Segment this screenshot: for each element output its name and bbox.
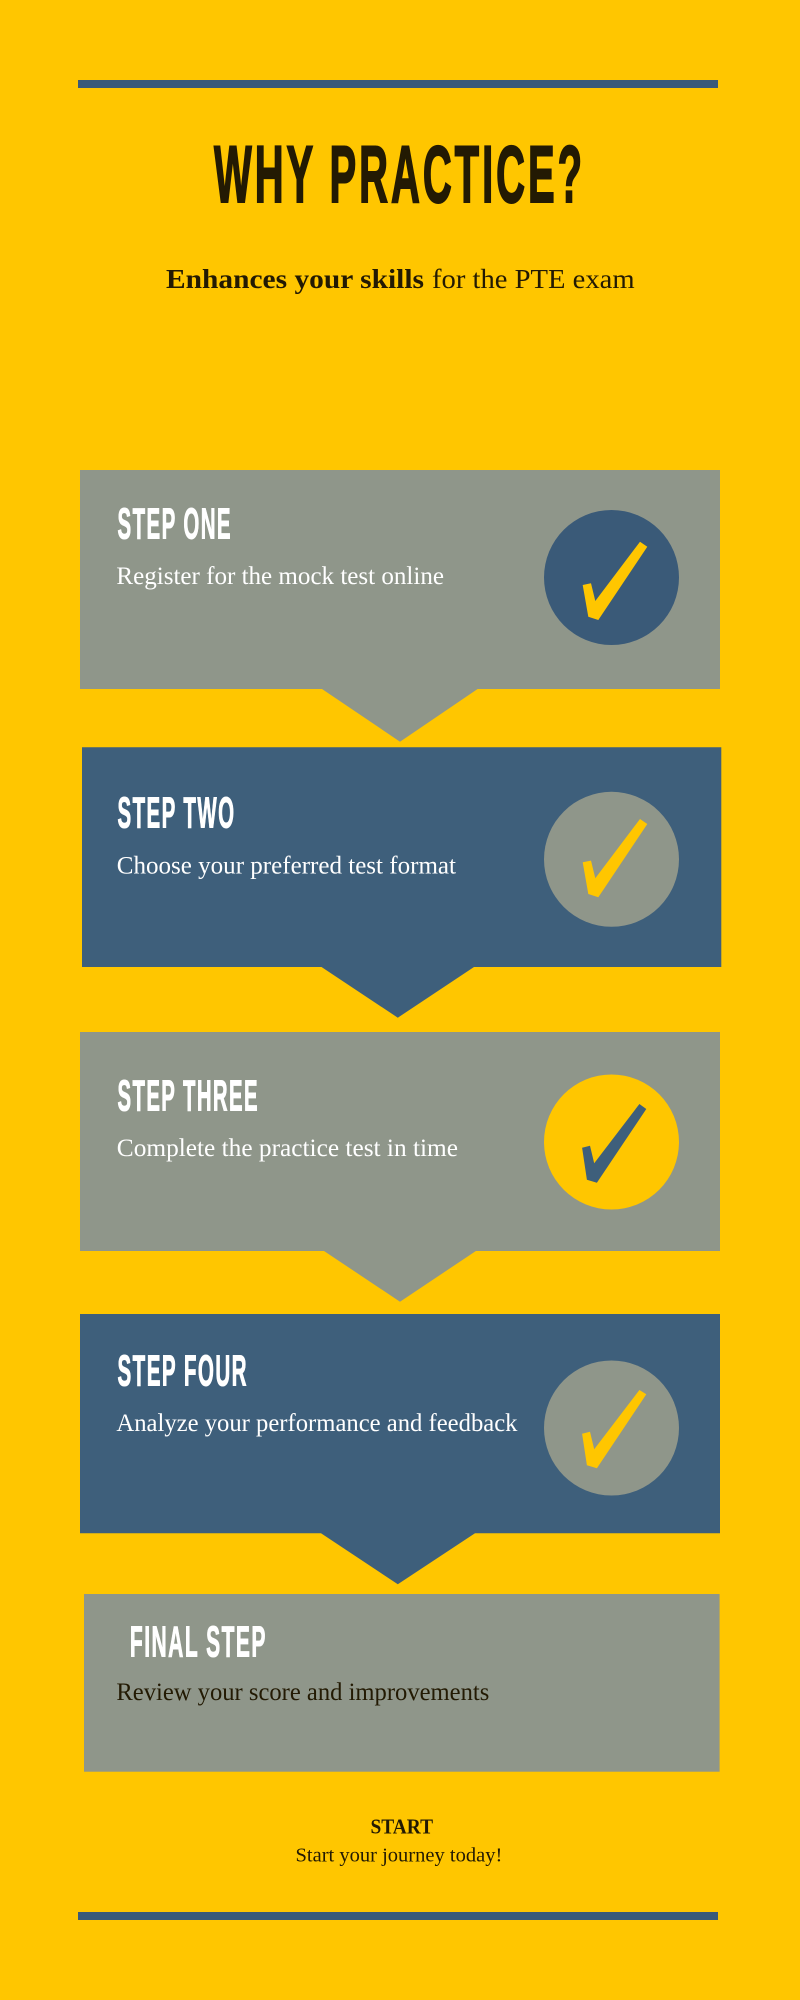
panel: step one xyxy=(80,470,720,742)
icon: check circle two xyxy=(544,792,679,927)
final step box xyxy=(84,1594,720,1772)
subtitle xyxy=(166,264,635,294)
panel: step one: STEP ONE xyxy=(118,500,232,548)
step three box with arrow xyxy=(80,1032,720,1302)
subtitle bold part: Enhances your skills xyxy=(166,264,424,294)
icon: check circle three xyxy=(544,1074,679,1210)
subtitle regular part: for the PTE exam xyxy=(432,264,635,294)
icon: check circle four xyxy=(544,1360,679,1496)
step one box with arrow xyxy=(80,470,720,742)
panel: step three: STEP THREE xyxy=(118,1072,259,1120)
bottom bar xyxy=(78,1912,718,1920)
panel: final step: FINAL STEP xyxy=(130,1618,267,1666)
start label: START xyxy=(370,1814,433,1838)
step two box with arrow xyxy=(82,747,721,1018)
step four text: Analyze your performance and feedback xyxy=(116,1410,518,1437)
start text: Start your journey today! xyxy=(296,1845,502,1867)
top bar xyxy=(78,80,718,88)
step four box with arrow xyxy=(80,1314,720,1584)
panel: step four xyxy=(80,1314,720,1584)
step three text: Complete the practice test in time xyxy=(117,1135,458,1162)
step one text: Register for the mock test online xyxy=(116,563,444,590)
panel: step three xyxy=(80,1032,720,1302)
panel: final step xyxy=(84,1594,720,1772)
final step text: Review your score and improvements xyxy=(116,1679,489,1706)
icon: check circle one xyxy=(544,510,679,645)
panel: step four: STEP FOUR xyxy=(118,1348,248,1396)
step two text: Choose your preferred test format xyxy=(117,852,456,879)
panel: step two xyxy=(82,747,721,1018)
panel: step two: STEP TWO xyxy=(118,790,236,838)
